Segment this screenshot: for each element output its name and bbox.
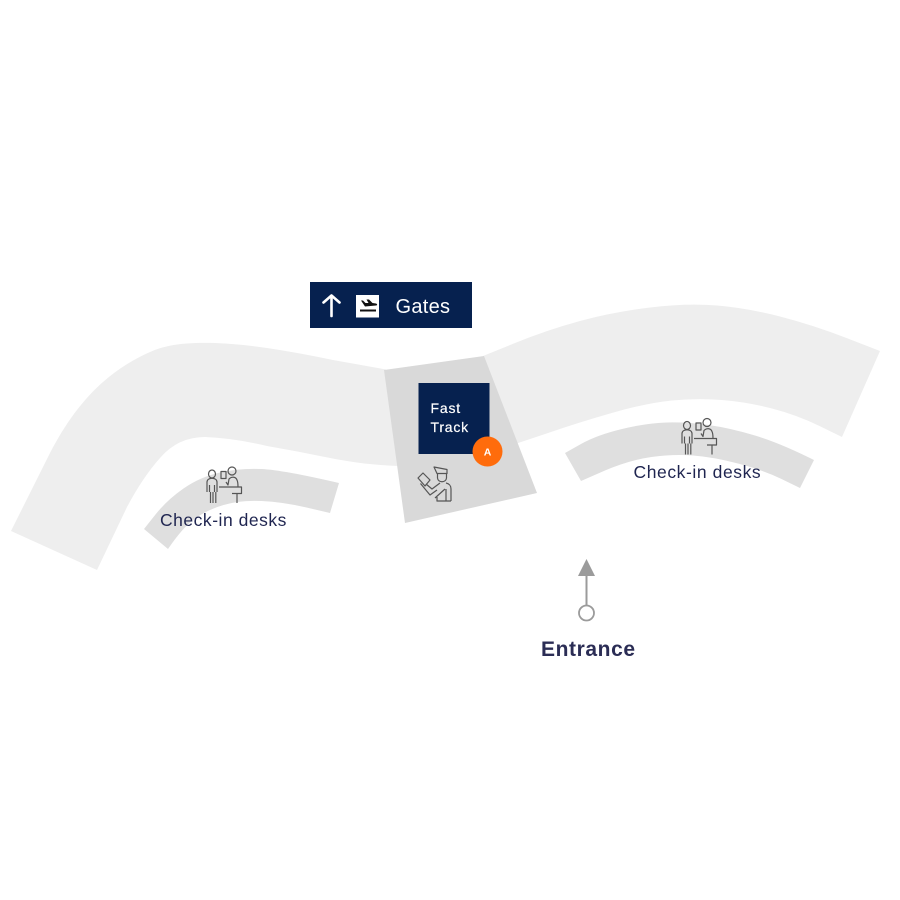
panel: terminal corridor left bbox=[11, 343, 399, 570]
panel: security zone bbox=[384, 356, 537, 523]
gates label: Gates bbox=[396, 296, 450, 318]
icon: up arrow bbox=[324, 296, 340, 316]
icon: check-in agents left bbox=[207, 467, 242, 503]
fast track label: Fast bbox=[430, 400, 461, 416]
marker A bbox=[472, 436, 502, 466]
right check-in label: Check-in desks bbox=[634, 462, 761, 482]
gates sign bbox=[310, 282, 472, 328]
icon: check-in agents right bbox=[682, 418, 716, 454]
entrance arrow bbox=[578, 559, 595, 620]
marker A: A bbox=[484, 446, 492, 458]
icon: departing plane bbox=[356, 295, 379, 318]
entrance label: Entrance bbox=[541, 638, 636, 661]
left check-in label: Check-in desks bbox=[160, 510, 287, 530]
panel: right check-in desks area bbox=[565, 422, 814, 488]
panel: left check-in desks area bbox=[144, 469, 339, 549]
icon: security officer bbox=[418, 467, 451, 501]
fast track box bbox=[418, 383, 490, 454]
fast track label: Track bbox=[430, 419, 469, 435]
panel: terminal corridor right bbox=[483, 305, 880, 444]
